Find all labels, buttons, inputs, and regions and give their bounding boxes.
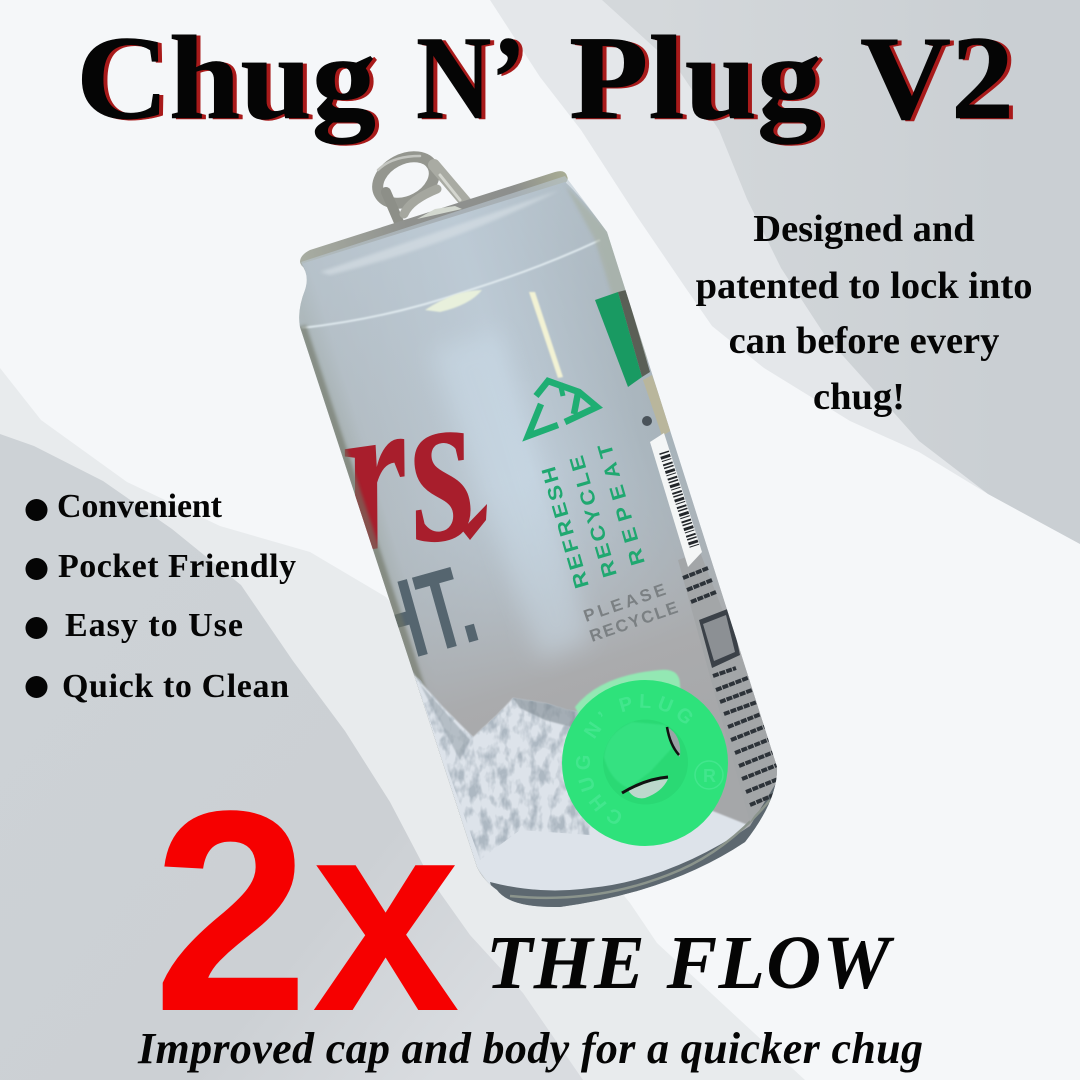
the flow: THE FLOW (486, 921, 895, 1005)
can please recycle note (583, 584, 678, 642)
can slogan: RECYCLE (566, 453, 622, 580)
plug ring emboss: CHUG N’ PLUG (576, 694, 692, 824)
can of beer (280, 147, 800, 920)
can brand script (344, 432, 487, 549)
title: Chug (76, 11, 376, 145)
big 2x (153, 752, 462, 1072)
can legal panel (678, 552, 785, 822)
can dark text strip (618, 290, 650, 377)
can pale strip (643, 375, 672, 436)
can soft reflection (441, 344, 589, 658)
title: Plug (569, 11, 822, 145)
feature: convenient: Convenient (57, 488, 223, 525)
plug hole (603, 720, 688, 804)
can glare (425, 290, 482, 312)
can neck highlight (302, 240, 600, 328)
can rim (300, 171, 568, 268)
can lid plate (417, 206, 462, 219)
can green label (595, 292, 642, 387)
text: design claim (696, 208, 1032, 418)
plug tab behind (575, 670, 682, 740)
can slogan: REFRESH (538, 464, 594, 591)
text: design claim: chug! (813, 376, 905, 418)
can shading (300, 176, 777, 907)
can please recycle note: RECYCLE (587, 597, 682, 646)
tagline: Improved cap and body for a quicker chug (137, 1024, 923, 1073)
can brand word: HT. (358, 541, 489, 689)
can barcode (650, 433, 702, 567)
green plug (562, 669, 728, 846)
can recycling symbol (528, 381, 597, 436)
plug bottom slit (622, 777, 668, 793)
text: design claim: can before every (729, 320, 999, 362)
plug opening right (667, 727, 680, 757)
can slogan (542, 446, 644, 588)
can vertical streak (529, 292, 563, 378)
plug registered mark: R (703, 766, 716, 786)
plug opening bottom (628, 779, 668, 798)
title: V2 (860, 11, 1014, 144)
can slogan: REPEAT (594, 441, 650, 568)
title: N’ (416, 11, 526, 144)
big 2x: x (312, 763, 462, 1069)
can left olive edge (298, 325, 488, 880)
feature list (26, 488, 296, 705)
plug registered mark (695, 761, 723, 789)
can brand script: rs (324, 337, 490, 601)
feature: quick to clean: Quick to Clean (62, 668, 289, 705)
background: bottom left dark wave (0, 434, 583, 1080)
plug inner cap (604, 722, 672, 788)
background: bottom left light wave (0, 368, 805, 1080)
can body (299, 182, 777, 907)
title (76, 11, 1014, 145)
plug right slit (667, 727, 679, 755)
plug ring (562, 680, 728, 846)
text: design claim: Designed and (753, 208, 975, 250)
feature: pocket friendly: Pocket Friendly (58, 548, 296, 585)
can side edge tint (565, 185, 650, 360)
big 2x: 2 (153, 752, 309, 1072)
feature: easy to use: Easy to Use (65, 607, 243, 644)
text: design claim: patented to lock into (696, 265, 1032, 307)
can mountain scene (410, 670, 748, 900)
can neck top glow (323, 194, 549, 275)
can pull tab (370, 147, 468, 227)
background: top right light wave (490, 0, 1080, 544)
can bottom rim (490, 784, 776, 907)
can please recycle note: PLEASE (581, 579, 671, 626)
can dot (642, 416, 652, 426)
background: top right dark wave (602, 0, 1080, 544)
